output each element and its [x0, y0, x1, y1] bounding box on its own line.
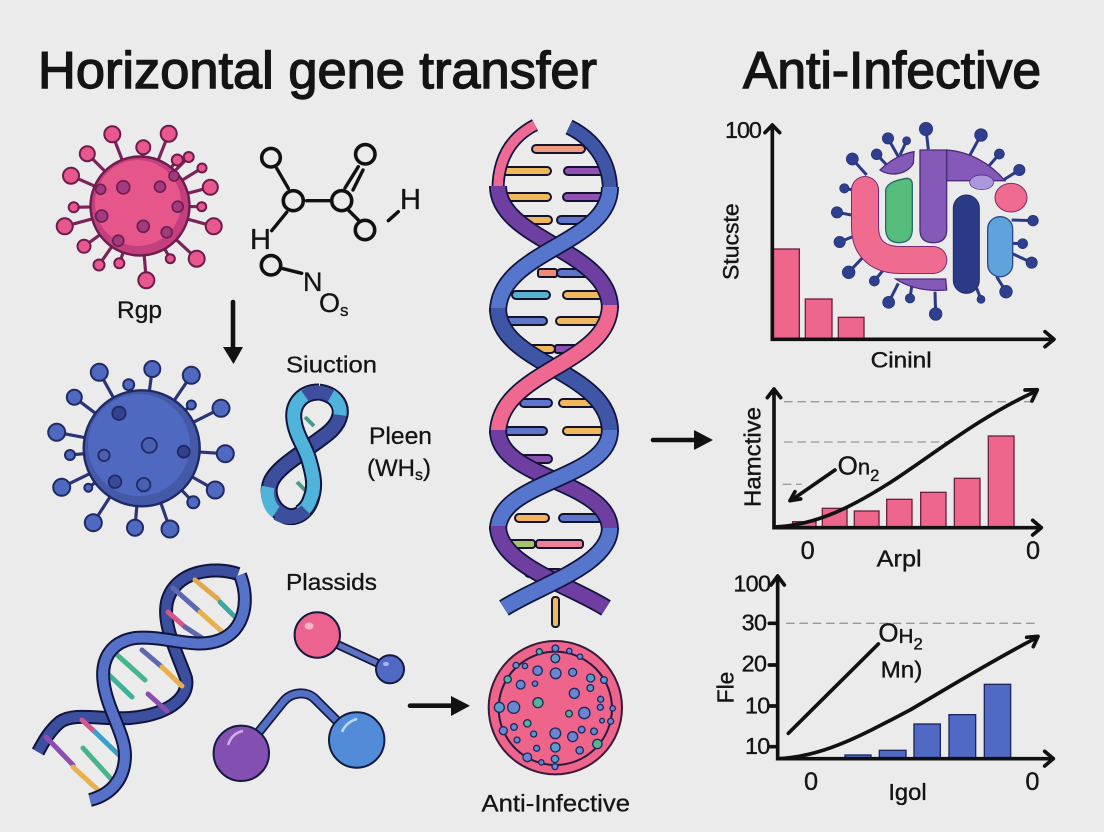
panel: chart 3: [712, 571, 1053, 805]
chart 3 guide line: [786, 621, 1035, 625]
chart 2 y axis label: Hamctive: [740, 407, 766, 507]
back strand: [38, 570, 238, 752]
chart 1 axes: [772, 127, 1053, 339]
icon: petri dish with colonies: [489, 641, 622, 774]
chemical structure: s: [340, 301, 349, 320]
chart 2 x labels: Arpl: [877, 546, 922, 572]
chart 3 axes and ticks: [769, 578, 1052, 759]
chart 3 x labels: Igol: [888, 779, 927, 805]
icon: small DNA double helix: [38, 570, 245, 800]
chemical structure: H: [250, 224, 271, 256]
chart 2 x labels: 0: [801, 537, 815, 565]
panel: chart 1 with virus: [719, 117, 1054, 372]
chart 3 callout line: [788, 644, 878, 733]
chart 3 x labels: 0: [804, 768, 818, 796]
chart 3 y axis tick labels: 30: [742, 610, 767, 636]
title: Horizontal gene transfer: Horizontal gene transfer: [38, 42, 597, 100]
label: Rgp: Rgp: [117, 297, 162, 324]
helix ribbons: [498, 125, 610, 608]
icon: large DNA double helix: [497, 125, 610, 627]
chart 3 callout text: 2: [913, 635, 923, 654]
arrow: down: [223, 302, 243, 364]
icon: pink virus: [57, 126, 222, 288]
rungs: [46, 580, 238, 790]
chart 2 callout arrow: [790, 470, 835, 501]
chemical structure: O: [319, 288, 340, 318]
chart 2 axes: [774, 390, 1040, 528]
icon: blue virus: [48, 361, 234, 538]
chart 2 guide lines: [783, 402, 1033, 484]
panel: chart 2: [740, 389, 1041, 572]
chart 2 bars: [793, 436, 1014, 528]
icon: plasmid molecule purple and blue: [214, 693, 384, 781]
chart 1 y max label: 100: [725, 117, 762, 143]
icon: figure-eight plasmid ribbon: [267, 392, 340, 517]
title: Anti-Infective: Anti-Infective: [743, 42, 1041, 100]
chart 3 x labels: 0: [1025, 768, 1039, 796]
arrow: DNA to charts: [653, 430, 713, 450]
chart 3 y axis tick labels: 20: [742, 651, 767, 677]
base pair rungs: [497, 145, 608, 627]
chart 1 x axis label: Cininl: [871, 347, 932, 372]
label: Plassids: Plassids: [286, 569, 377, 595]
chart 2 callout text: On: [838, 450, 870, 480]
chart 3 trend curve arrow: [778, 636, 1038, 759]
label: Pleen (WHs): ): [423, 455, 431, 482]
label: Pleen (WHs): (WH: [367, 455, 415, 482]
chart 3 bars: [845, 684, 1011, 759]
chart 3 y axis tick labels: 100: [733, 571, 771, 597]
chart 3 callout text: O: [878, 618, 899, 648]
chart 1 y axis label: Stucste: [719, 203, 744, 280]
chart 3 y axis tick labels: 10: [745, 692, 770, 718]
chart 3 y axis tick labels: 10: [745, 733, 770, 759]
chart 3 x labels: [804, 768, 1039, 805]
chart 2 callout text: 2: [870, 466, 879, 485]
chart 3 callout text: H: [899, 625, 913, 648]
icon: plasmid molecule pink and blue: [295, 612, 404, 683]
label: Pleen (WHs): s: [415, 467, 423, 484]
chemical structure: [250, 145, 421, 320]
label: Pleen (WHs): Pleen: [369, 423, 432, 450]
chemical structure: N: [303, 267, 322, 297]
label: Anti-Infective: Anti-Infective: [482, 790, 630, 818]
chart 2 x labels: [801, 537, 1040, 572]
label: Pleen (WHs): [367, 423, 432, 484]
chemical structure: H: [400, 184, 421, 216]
chart 1 bars: [773, 249, 864, 339]
chart 3 y axis tick labels: [733, 571, 771, 759]
arrow: to petri dish: [410, 696, 470, 716]
chart 3 callout text: Mn): [881, 656, 922, 682]
icon: virus with segments: [831, 122, 1038, 320]
label: Siuction: Siuction: [286, 352, 377, 378]
chart 2 x labels: 0: [1026, 537, 1040, 565]
chart 2 trend curve arrow: [775, 390, 1037, 527]
chart 3 callout text: [878, 618, 923, 682]
front strand: [90, 575, 245, 800]
chart 3 y axis label: Fle: [712, 672, 738, 703]
